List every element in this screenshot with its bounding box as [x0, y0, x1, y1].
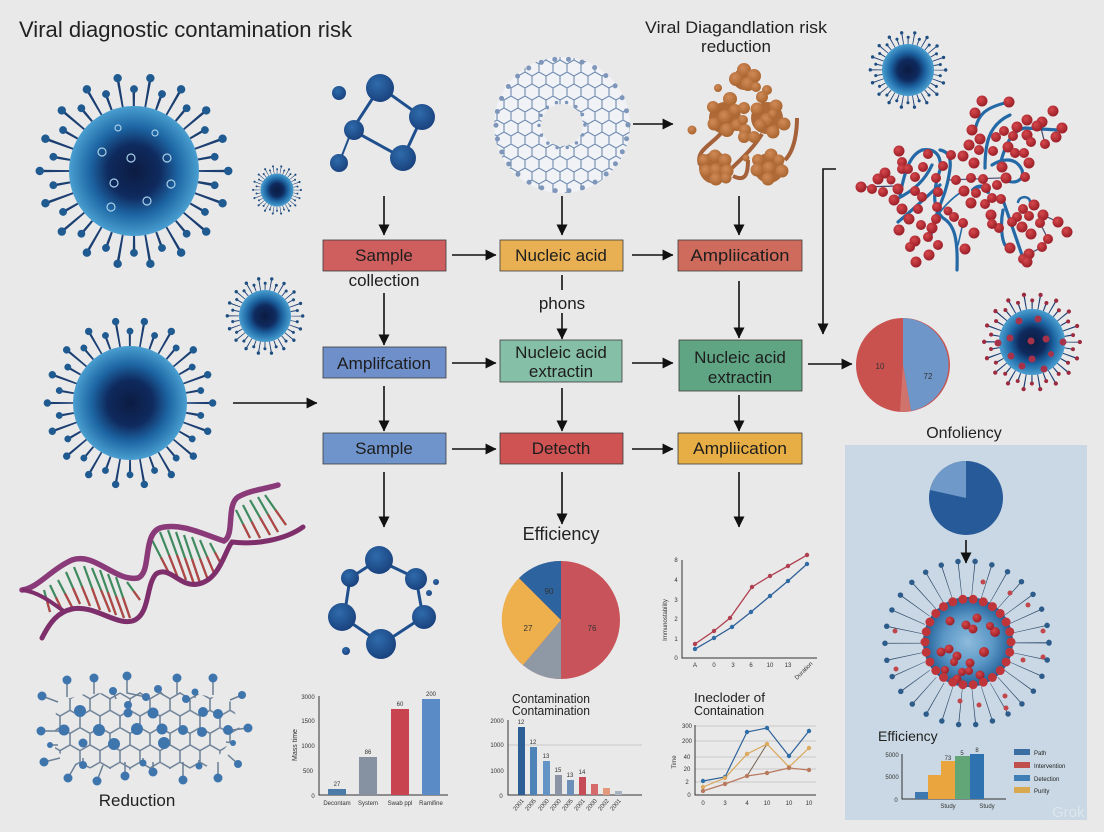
line chart: incidence: 2	[685, 780, 689, 786]
bar chart: contamination: 13	[543, 754, 550, 760]
line chart: trend: A	[693, 663, 697, 669]
bar chart: contamination: 0	[499, 794, 503, 800]
box: Amplification	[678, 240, 802, 271]
bar chart: contamination: 2001	[513, 798, 526, 812]
line chart: trend: 1	[674, 637, 678, 643]
heading: risk reduction	[645, 18, 828, 56]
pie chart: top right: 10	[876, 362, 885, 371]
bar chart: samples: 200	[426, 692, 437, 698]
arrow: molecule to pie	[823, 169, 836, 334]
bar chart: samples: Decontam	[323, 801, 351, 807]
legend: Path	[1034, 751, 1046, 757]
pie chart: efficiency	[502, 561, 620, 679]
heading: Contamination	[512, 691, 590, 718]
heading: Incidence of Contamination	[694, 690, 765, 718]
box: Sample blue	[323, 433, 446, 464]
heading: Incidence of Contamination: Containation	[694, 703, 764, 718]
heading: risk reduction: reduction	[701, 37, 771, 56]
bar chart: samples: 1500	[301, 719, 315, 725]
box: Nucleic acid extraction teal: Nucleic acid	[515, 343, 607, 362]
icon: large virus	[39, 76, 229, 266]
watermark: Grok	[1052, 804, 1085, 821]
line chart: trend: Duration	[794, 661, 814, 681]
icon: orange molecular cluster	[688, 63, 797, 186]
line chart: trend: 2	[674, 617, 678, 623]
box: Detection	[500, 433, 623, 464]
box: Nucleic acid	[500, 240, 623, 271]
bar chart: contamination: 13	[567, 773, 574, 779]
box: Sample blue: Sample	[355, 439, 413, 458]
line chart: trend: 8	[674, 558, 678, 564]
heading: Contamination: Contamination	[512, 703, 590, 718]
bar chart: samples: 86	[365, 750, 372, 756]
heading: Onfoliency: Onfoliency	[926, 425, 1002, 442]
box: Amplification yellow	[678, 433, 802, 464]
box: Nucleic acid extraction teal	[500, 340, 622, 382]
box: Sample: Sample	[355, 246, 413, 265]
icon: tiny virus	[253, 166, 301, 214]
icon: bottom ring molecule	[328, 546, 439, 659]
legend: Purity	[1034, 789, 1049, 795]
line chart: incidence	[672, 724, 816, 807]
box: Nucleic acid extraction green: Nucleic acid	[694, 348, 786, 367]
bar chart: samples: Swab ppl	[388, 801, 412, 807]
box: Nucleic acid: Nucleic acid	[515, 246, 607, 265]
icon: virus with red dots	[984, 294, 1080, 390]
bar chart: contamination: 14	[579, 770, 586, 776]
bar chart: efficiency: 73	[945, 756, 952, 762]
bar chart: efficiency: 5	[960, 751, 964, 757]
bar chart: contamination: 2000	[490, 719, 504, 725]
bar chart: contamination: 2001	[610, 798, 623, 812]
line chart: incidence: Time	[672, 755, 678, 769]
title: Viral diagnostic contamination risk	[19, 17, 353, 42]
arrows: fourth row	[384, 449, 739, 527]
bar chart: contamination: 1000	[490, 769, 504, 775]
bar chart: efficiency	[885, 748, 1006, 810]
box: Amplification blue: Amplifcation	[337, 354, 431, 373]
box: Amplification: Ampliication	[690, 246, 790, 265]
line chart: trend: 3	[731, 663, 735, 669]
icon: left virus	[47, 320, 213, 486]
heading: Contamination: Contamination	[512, 691, 590, 706]
legend: Detection	[1034, 777, 1059, 783]
line chart: incidence: 3	[723, 801, 727, 807]
icon: hexagonal ring network	[490, 53, 634, 197]
panel: efficiency	[845, 445, 1087, 821]
label: Reduction: Reduction	[99, 791, 175, 810]
pie chart: efficiency: 76	[588, 624, 597, 633]
box: Nucleic acid extraction green: extractin	[708, 368, 772, 387]
box: Nucleic acid extraction teal: extractin	[529, 362, 593, 381]
pie chart: efficiency: 90	[545, 587, 554, 596]
bar chart: contamination: 12	[530, 740, 537, 746]
bar chart: samples: 500	[303, 769, 314, 775]
bar chart: contamination: 1000	[490, 743, 504, 749]
heading: risk reduction: Viral Diagandlation risk	[645, 18, 828, 37]
pie chart: panel	[929, 461, 1003, 535]
box: Nucleic acid extraction green	[679, 340, 802, 391]
bar chart: efficiency: 8	[975, 748, 979, 754]
bar chart: samples: Mass time	[292, 729, 299, 761]
heading: Efficiency: Efficiency	[878, 728, 938, 744]
bar chart: samples: 3000	[301, 695, 315, 701]
line chart: trend: 10	[767, 663, 774, 669]
line chart: incidence: 20	[684, 767, 691, 773]
line chart: incidence: 200	[682, 739, 693, 745]
line chart: incidence: 10	[764, 801, 771, 807]
label: phons: phons	[539, 294, 585, 313]
legend: Intervention	[1034, 764, 1065, 770]
box: Sample	[323, 240, 446, 271]
bar chart: efficiency: 0	[894, 798, 898, 804]
box: Detection: Detecth	[532, 439, 590, 458]
line chart: trend: Immunostability	[663, 599, 669, 641]
arrows: first row down	[384, 196, 739, 235]
line chart: trend: 3	[674, 598, 678, 604]
arrows: third row	[233, 363, 852, 431]
bar chart: contamination: 2005	[525, 798, 538, 812]
icon: top molecule	[330, 74, 435, 172]
arrow: network to cluster	[633, 123, 673, 125]
bar chart: contamination: 2002	[598, 798, 611, 812]
heading: Efficiency centre: Efficiency	[523, 524, 599, 544]
bar chart: contamination: 15	[555, 768, 562, 774]
line chart: trend: 4	[674, 578, 678, 584]
line chart: incidence: 10	[806, 801, 813, 807]
pie chart: top right	[856, 318, 950, 412]
bar chart: samples: 27	[334, 782, 341, 788]
bar chart: efficiency: Study	[940, 804, 956, 810]
arrows: second row	[384, 255, 739, 345]
bar chart: samples: 1000	[301, 744, 315, 750]
bar chart: samples: 60	[397, 702, 404, 708]
bar chart: contamination: 2001	[574, 798, 587, 812]
box: Amplification blue	[323, 347, 446, 378]
bar chart: samples: System	[358, 801, 378, 807]
icon: DNA double helix	[22, 485, 303, 638]
line chart: incidence: 4	[745, 801, 749, 807]
bar chart: contamination: 2000	[538, 798, 551, 812]
icon: top right virus	[870, 32, 946, 108]
legend	[1014, 749, 1065, 795]
line chart: trend: 6	[749, 663, 753, 669]
line chart: trend: 13	[785, 663, 792, 669]
bar chart: samples	[292, 692, 448, 807]
icon: medium virus	[227, 278, 303, 354]
heading: Incidence of Contamination: Inecloder of	[694, 690, 765, 705]
bar chart: contamination: 2005	[562, 798, 575, 812]
icon: virus with red ring	[885, 561, 1049, 725]
bar chart: contamination: 12	[518, 720, 525, 726]
bar chart: samples: 0	[311, 794, 315, 800]
arrow: pie to virus	[965, 540, 967, 563]
line chart: incidence: 0	[687, 793, 691, 799]
pie chart: top right: 72	[924, 372, 933, 381]
line chart: trend: 0	[712, 663, 716, 669]
box: Amplification yellow: Ampliication	[693, 439, 787, 458]
bar chart: samples: Ramifine	[419, 801, 443, 807]
line chart: incidence: 300	[682, 724, 693, 730]
bar chart: efficiency: 5000	[885, 775, 899, 781]
bar chart: contamination	[490, 719, 642, 812]
line chart: incidence: 40	[684, 755, 691, 761]
line chart: incidence: 10	[786, 801, 793, 807]
pie chart: efficiency: 27	[524, 624, 533, 633]
bar chart: contamination: 2000	[586, 798, 599, 812]
line chart: incidence: 0	[701, 801, 705, 807]
label: collection: collection	[349, 271, 419, 290]
bar chart: contamination: 2000	[550, 798, 563, 812]
icon: bottom left network	[36, 672, 252, 786]
bar chart: efficiency: 5000	[885, 753, 899, 759]
bar chart: efficiency: Study	[979, 804, 995, 810]
line chart: trend	[663, 553, 817, 681]
line chart: trend: 0	[674, 656, 678, 662]
icon: red and blue branching molecule	[856, 96, 1072, 270]
